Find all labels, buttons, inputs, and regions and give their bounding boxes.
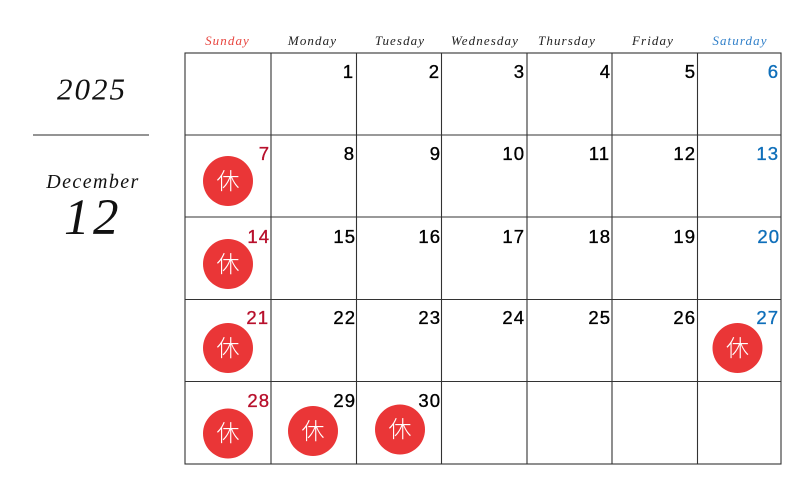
date numbers: 20: [757, 226, 780, 247]
weekday header row: [205, 33, 768, 48]
date numbers: 16: [418, 226, 441, 247]
month number: 12: [64, 190, 122, 246]
date numbers: 21: [246, 307, 269, 328]
date numbers: 27: [756, 307, 779, 328]
date numbers: 2: [429, 61, 440, 82]
date numbers: 24: [502, 307, 525, 328]
date numbers: 3: [514, 61, 525, 82]
weekday header row: Monday: [287, 33, 337, 48]
date numbers: 13: [756, 143, 779, 164]
holiday markers: 休: [388, 416, 412, 442]
holiday markers: 休: [216, 251, 240, 277]
calendar grid: [185, 53, 781, 464]
year heading: 2025: [57, 72, 127, 106]
date numbers: 5: [685, 61, 696, 82]
holiday markers: 休: [216, 168, 240, 194]
holiday markers: 休: [302, 418, 324, 444]
date numbers: 7: [259, 143, 270, 164]
weekday header row: Saturday: [712, 33, 768, 48]
date numbers: 6: [768, 61, 779, 82]
date numbers: 18: [588, 226, 611, 247]
weekday header row: Sunday: [205, 33, 250, 48]
date numbers: 15: [333, 226, 356, 247]
date numbers: 14: [247, 226, 270, 247]
date numbers: 23: [418, 307, 441, 328]
holiday markers: [203, 156, 762, 458]
holiday markers: 休: [726, 335, 749, 361]
date numbers: 11: [589, 143, 610, 164]
weekday header row: Tuesday: [375, 33, 425, 48]
date numbers: 19: [673, 226, 696, 247]
date numbers: 25: [588, 307, 611, 328]
holiday markers: 休: [216, 335, 240, 361]
date numbers: 26: [673, 307, 696, 328]
date numbers: 10: [502, 143, 525, 164]
date numbers: 29: [333, 390, 356, 411]
date numbers: 1: [343, 61, 354, 82]
month name: December: [45, 171, 140, 193]
date numbers: 28: [247, 390, 270, 411]
date numbers: 9: [430, 143, 441, 164]
holiday markers: 休: [216, 420, 240, 446]
weekday header row: Wednesday: [451, 33, 519, 48]
date numbers: 22: [333, 307, 356, 328]
date numbers: 17: [502, 226, 525, 247]
weekday header row: Friday: [631, 33, 674, 48]
date numbers: 8: [344, 143, 355, 164]
date numbers: 12: [673, 143, 696, 164]
date numbers: 30: [418, 390, 441, 411]
date numbers: 4: [600, 61, 611, 82]
weekday header row: Thursday: [538, 33, 596, 48]
date numbers: [246, 61, 780, 411]
